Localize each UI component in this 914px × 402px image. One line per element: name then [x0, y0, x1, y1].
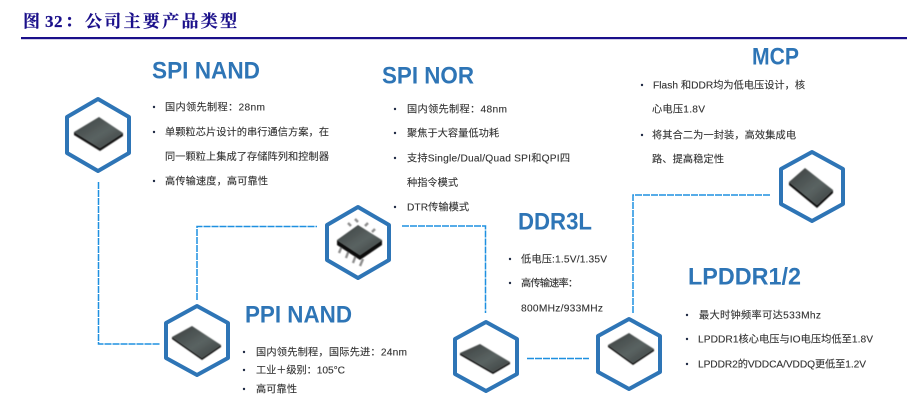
heading: LPDDR1/2: LPDDR1/2 — [688, 264, 801, 290]
icon: MCP chip in hexagon — [781, 152, 843, 221]
connector: DDR3L to LPDDR1/2 — [527, 358, 589, 360]
text block: SPI NAND features: 国内领先制程：28nm — [165, 100, 265, 114]
text block: MCP features: Flash 和DDR均为低电压设计，核 — [653, 78, 805, 92]
panel: PPI NAND — [166, 302, 407, 396]
text block: SPI NAND features: 同一颗粒上集成了存储阵列和控制器 — [165, 150, 329, 163]
text block: MCP features: 心电压1.8V — [652, 102, 705, 116]
text block: SPI NAND features: 单颗粒芯片设计的串行通信方案，在 — [165, 126, 329, 138]
text block: SPI NOR features: 国内领先制程：48nm — [407, 102, 507, 116]
text block: MCP features: 路、提高稳定性 — [652, 152, 724, 166]
text block: MCP features: 将其合二为一封装，高效集成电 — [652, 128, 796, 142]
text block: DDR3L features: 高传输速率： — [521, 276, 578, 290]
connector: LPDDR1/2 to MCP — [633, 195, 770, 313]
connector: SPI NAND to PPI NAND — [98, 182, 160, 344]
icon: PPI NAND chip in hexagon — [166, 306, 228, 375]
text block: SPI NAND features: 高传输速度，高可靠性 — [165, 174, 268, 188]
text block: LPDDR1/2 features: LPDDR2的VDDCA/VDDQ更低至1.2V — [698, 358, 866, 370]
connector: SPI NOR to DDR3L — [402, 226, 486, 313]
text block: LPDDR1/2 features: 最大时钟频率可达533Mhz — [699, 308, 821, 322]
text block: PPI NAND features: 工业＋级别：105°C — [256, 364, 345, 376]
text block: DDR3L features: 低电压:1.5V/1.35V — [521, 252, 607, 266]
heading: PPI NAND: PPI NAND — [245, 302, 352, 328]
panel: SPI NAND — [67, 58, 329, 188]
text block: MCP features — [641, 78, 805, 166]
text block: PPI NAND features: 高可靠性 — [256, 382, 297, 396]
icon: SPI NOR chip in hexagon — [327, 207, 389, 278]
heading: SPI NAND: SPI NAND — [152, 58, 260, 84]
text block: LPDDR1/2 features — [686, 308, 873, 370]
heading: DDR3L: DDR3L — [518, 208, 592, 236]
panel: DDR3L — [455, 208, 607, 391]
text block: SPI NOR features: 聚焦于大容量低功耗 — [407, 126, 499, 140]
text block: DDR3L features — [509, 252, 607, 314]
connector: PPI NAND to SPI NOR — [197, 226, 317, 300]
panel: SPI NOR — [327, 62, 570, 278]
panel: MCP — [641, 44, 843, 221]
text block: SPI NOR features: DTR传输模式 — [407, 200, 469, 214]
text block: SPI NOR features: 种指令模式 — [407, 176, 458, 189]
icon: DDR3L chip in hexagon — [455, 322, 517, 391]
heading: MCP: MCP — [752, 44, 799, 70]
text block: PPI NAND features: 国内领先制程，国际先进：24nm — [256, 346, 407, 358]
text block: PPI NAND features — [243, 346, 407, 396]
title rule — [21, 37, 907, 39]
text block: SPI NAND features — [153, 100, 329, 188]
text block: SPI NOR features: 支持Single/Dual/Quad SPI和QPI四 — [407, 152, 570, 164]
text block: DDR3L features: 800MHz/933MHz — [521, 304, 603, 314]
panel: LPDDR1/2 — [598, 264, 873, 389]
heading: SPI NOR: SPI NOR — [382, 62, 474, 90]
title: 图32：公司主要产品类型 — [23, 11, 237, 31]
text block: LPDDR1/2 features: LPDDR1核心电压与IO电压均低至1.8V — [698, 332, 873, 346]
text block: SPI NOR features — [394, 102, 570, 214]
icon: SPI NAND chip in hexagon — [67, 99, 129, 171]
icon: LPDDR1/2 chip in hexagon — [598, 319, 660, 389]
